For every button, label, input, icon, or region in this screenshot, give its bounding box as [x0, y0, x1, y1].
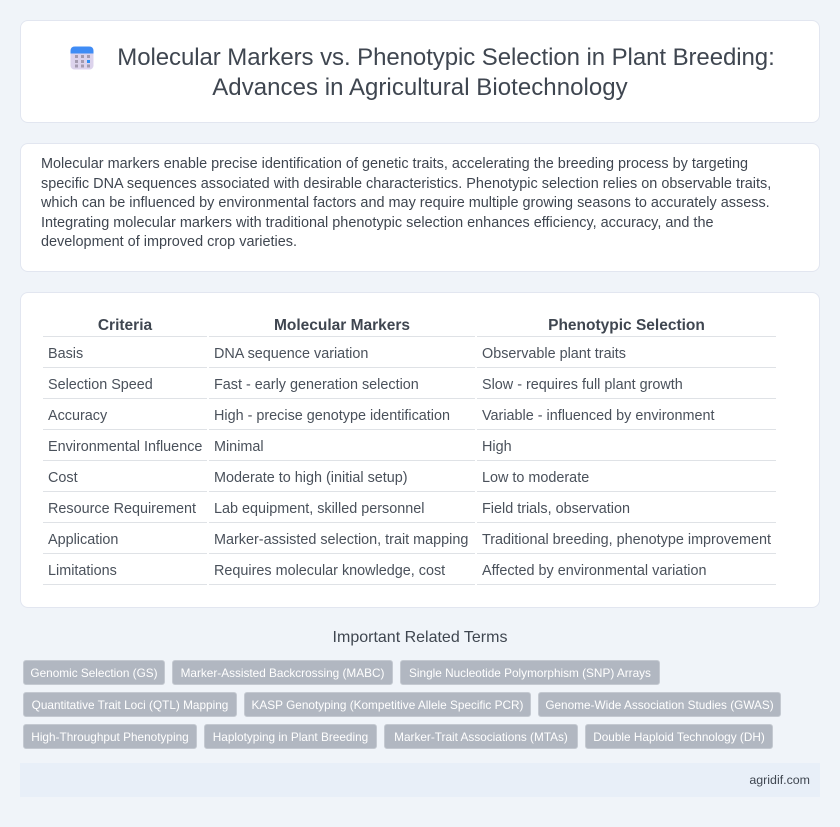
tag: Marker-Assisted Backcrossing (MABC) — [181, 666, 384, 680]
icon: calendar grid — [70, 46, 94, 70]
table row: Application: Traditional breeding, phenotype improvement — [482, 532, 771, 548]
panel: intro text — [20, 143, 820, 272]
table header row — [43, 317, 776, 337]
table row: Basis — [43, 346, 776, 368]
table row: Basis: Observable plant traits — [482, 346, 626, 362]
tag — [23, 724, 197, 749]
tag — [384, 724, 578, 749]
footer source: agridif.com — [749, 773, 810, 787]
table row: Accuracy: Accuracy — [48, 408, 107, 424]
title: Molecular Markers vs. Phenotypic Selection in Plant Breeding: — [117, 44, 775, 71]
intro paragraph — [41, 156, 771, 250]
table row: Application — [43, 532, 776, 554]
tag — [585, 724, 773, 749]
table row: Environmental Influence: Environmental Influence — [48, 439, 202, 455]
tag — [400, 660, 660, 685]
table row: Selection Speed: Selection Speed — [48, 377, 153, 393]
panel: comparison table — [20, 292, 820, 608]
tag: Quantitative Trait Loci (QTL) Mapping — [32, 698, 228, 712]
table header row: Phenotypic Selection — [548, 317, 705, 334]
tag list: related terms — [23, 660, 781, 749]
table row: Selection Speed — [43, 377, 776, 399]
table row: Application: Application — [48, 532, 118, 548]
table row: Accuracy — [43, 408, 776, 430]
tag: Haplotyping in Plant Breeding — [213, 730, 368, 744]
table row: Cost: Cost — [48, 470, 78, 486]
table row: Cost — [43, 470, 776, 492]
table row: Cost: Low to moderate — [482, 470, 589, 486]
tag — [23, 660, 165, 685]
table row: Environmental Influence — [43, 439, 776, 461]
table row: Selection Speed: Slow - requires full plant growth — [482, 377, 683, 393]
table header row: Molecular Markers — [274, 317, 410, 334]
table header row: Criteria — [98, 317, 152, 334]
table row: Accuracy: High - precise genotype identification — [214, 408, 450, 424]
tag: KASP Genotyping (Kompetitive Allele Specific PCR) — [252, 698, 523, 712]
title: Advances in Agricultural Biotechnology — [212, 74, 628, 101]
table row: Basis: DNA sequence variation — [214, 346, 368, 362]
tag — [23, 692, 237, 717]
table row: Limitations: Limitations — [48, 563, 117, 579]
tag: High-Throughput Phenotyping — [31, 730, 189, 744]
table row: Basis: Basis — [48, 346, 83, 362]
tag: Marker-Trait Associations (MTAs) — [394, 730, 568, 744]
panel: header — [20, 20, 820, 123]
table row: Resource Requirement — [43, 501, 776, 523]
intro paragraph: specific DNA sequences associated with desirable characteristics. Phenotypic selection relies on observable traits, — [41, 176, 771, 192]
intro paragraph: Molecular markers enable precise identification of genetic traits, accelerating the breeding process by targeting — [41, 156, 748, 172]
table row: Limitations — [43, 563, 776, 585]
intro paragraph: development of improved crop varieties. — [41, 234, 297, 250]
tag: Genome-Wide Association Studies (GWAS) — [545, 698, 774, 712]
table row: Resource Requirement: Field trials, observation — [482, 501, 630, 517]
tag — [172, 660, 393, 685]
table row: Accuracy: Variable - influenced by environment — [482, 408, 715, 424]
tag — [538, 692, 781, 717]
table row: Limitations: Requires molecular knowledge, cost — [214, 563, 445, 579]
tag: Genomic Selection (GS) — [30, 666, 158, 680]
table row: Resource Requirement: Resource Requirement — [48, 501, 196, 517]
table row: Selection Speed: Fast - early generation selection — [214, 377, 419, 393]
intro paragraph: Integrating molecular markers with traditional phenotypic selection enhances efficiency, accuracy, and the — [41, 214, 714, 230]
intro paragraph: which can be influenced by environmental factors and may require multiple growing seasons to accurately assess. — [41, 195, 770, 211]
heading: Important Related Terms: Important Related Terms — [333, 629, 507, 646]
tag — [204, 724, 377, 749]
table row: Cost: Moderate to high (initial setup) — [214, 470, 408, 486]
title — [117, 44, 775, 101]
table row: Resource Requirement: Lab equipment, skilled personnel — [214, 501, 424, 517]
tag — [244, 692, 531, 717]
footer bar — [20, 763, 820, 797]
table row: Application: Marker-assisted selection, trait mapping — [214, 532, 468, 548]
table row: Environmental Influence: High — [482, 439, 512, 455]
table row: Limitations: Affected by environmental variation — [482, 563, 707, 579]
tag: Double Haploid Technology (DH) — [593, 730, 765, 744]
tag: Single Nucleotide Polymorphism (SNP) Arrays — [409, 666, 651, 680]
table row: Environmental Influence: Minimal — [214, 439, 264, 455]
